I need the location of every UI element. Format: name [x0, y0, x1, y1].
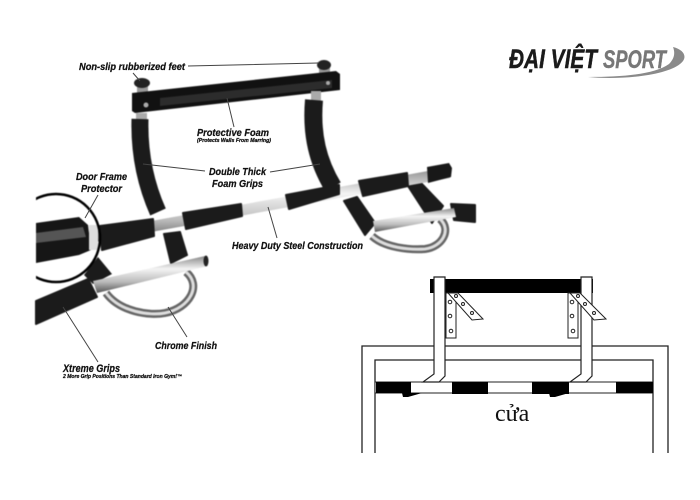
- door installation diagram: [362, 277, 668, 453]
- product photo: door gym bar: [12, 60, 475, 324]
- label: protective foam: [197, 98, 271, 144]
- left bracket: [446, 293, 483, 338]
- label: chrome finish: [155, 307, 217, 352]
- label: protective foam: (Protects Walls From Marring): [197, 138, 271, 144]
- handle end cap: [204, 256, 208, 266]
- left post: [423, 277, 445, 382]
- label: chrome finish: Chrome Finish: [155, 340, 217, 352]
- main bar end cap: [427, 163, 452, 183]
- label: xtreme grips: [62, 307, 182, 380]
- label: door frame protector: Protector: [81, 184, 123, 195]
- right outer grip: [451, 204, 475, 222]
- label: double thick foam grips: [143, 164, 320, 190]
- left lower grip stub: [84, 257, 112, 284]
- left D-ring chrome: [106, 272, 193, 314]
- logo: Dai Viet Sport: [509, 43, 684, 78]
- left rear grip: [164, 232, 187, 263]
- label: non-slip rubberized feet: Non-slip rubberized feet: [79, 62, 186, 73]
- left post chrome: [136, 113, 147, 121]
- door label: cửa: [495, 401, 530, 427]
- label: double thick foam grips: Foam Grips: [212, 178, 263, 190]
- label: protective foam: Protective Foam: [197, 127, 269, 139]
- right front grip: [344, 197, 375, 235]
- label: heavy duty steel construction: Heavy Duty Steel Construction: [232, 240, 363, 252]
- main bar chrome: [90, 167, 450, 243]
- right post chrome: [311, 91, 321, 101]
- right curved foam grip: [313, 100, 333, 187]
- label: xtreme grips: Xtreme Grips: [62, 363, 120, 375]
- protective foam top bar: [132, 71, 340, 113]
- right post: [570, 277, 592, 382]
- xtreme grip: [36, 279, 97, 324]
- zoom circle: door frame protector: [35, 192, 102, 284]
- left chrome handle: [93, 256, 208, 293]
- top black bar: [430, 279, 593, 293]
- logo: Dai Viet Sport: SPORT: [603, 46, 668, 74]
- label: non-slip rubberized feet: [79, 62, 318, 81]
- main bar grip 1: [100, 219, 154, 250]
- right D-ring chrome: [372, 219, 445, 249]
- right rear grip: [408, 182, 443, 223]
- door bar: [375, 382, 653, 397]
- label: door frame protector: [76, 172, 127, 218]
- left rubber foot: [134, 78, 150, 95]
- main bar grip 2: [183, 204, 242, 229]
- label: double thick foam grips: Double Thick: [209, 166, 267, 178]
- label: heavy duty steel construction: [232, 207, 363, 252]
- infographic canvas: [34, 44, 684, 453]
- left curved foam grip: [140, 119, 158, 212]
- label: xtreme grips: 2 More Grip Positions Than Standard Iron Gym!™: [62, 374, 182, 380]
- right rubber foot: [317, 60, 331, 75]
- door frame: [362, 346, 668, 453]
- right bracket: [568, 293, 606, 338]
- right chrome handle: [373, 208, 456, 232]
- label: door frame protector: Door Frame: [76, 172, 127, 183]
- main bar grip 4: [359, 173, 408, 196]
- main bar grip 3: [286, 185, 339, 209]
- logo: Dai Viet Sport: ĐẠI VIỆT: [509, 43, 599, 74]
